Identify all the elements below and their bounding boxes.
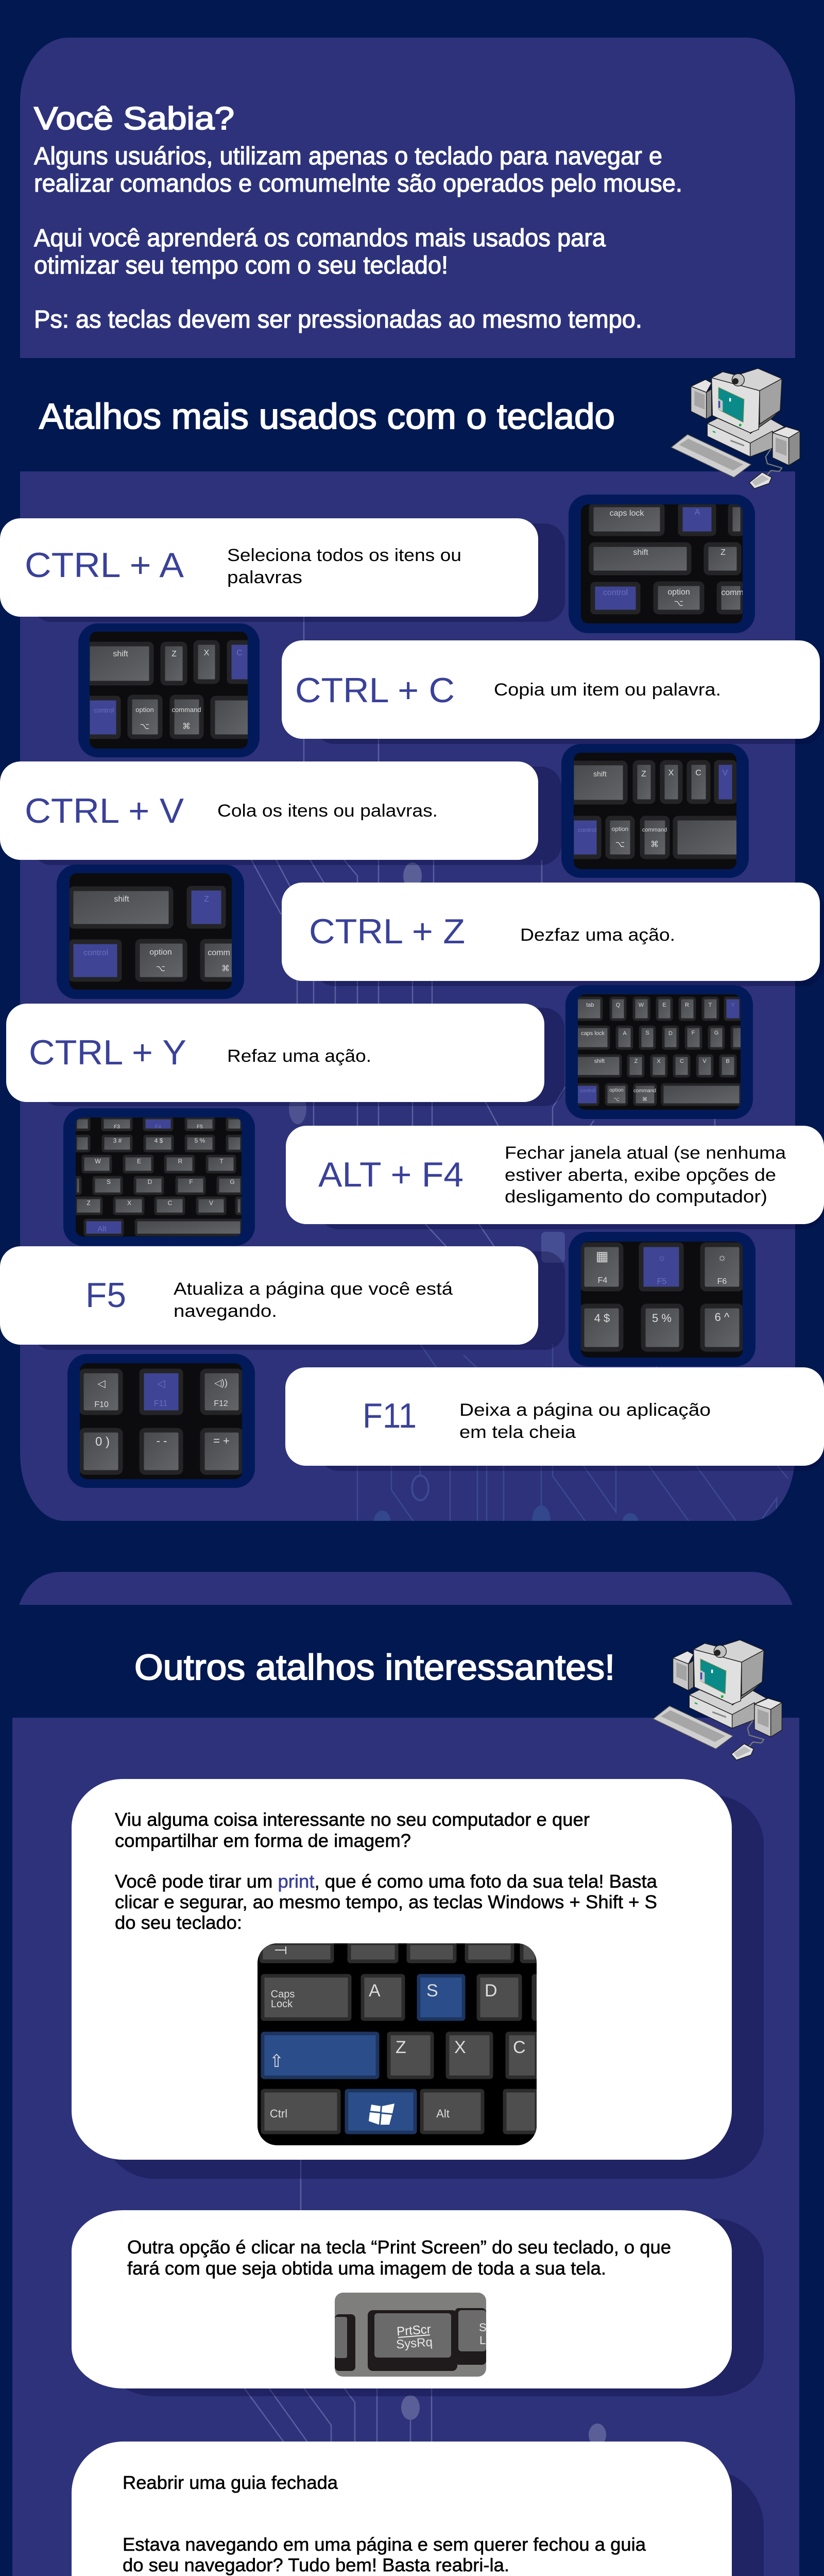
keyboard image: Z: ⌥ bbox=[156, 964, 165, 973]
text block: reabrir: do seu navegador? Tudo bem! Basta reabri-la. bbox=[123, 2554, 509, 2575]
text block: intro: Alguns usuários, utilizam apenas o teclado para navegar e bbox=[34, 143, 662, 170]
keyboard image: prtscr key: PrtScr bbox=[396, 2323, 432, 2338]
keyboard image: F4: V bbox=[209, 1199, 213, 1207]
text block: print intro: do seu teclado: bbox=[115, 1912, 242, 1933]
card: CTRL + C bbox=[282, 640, 820, 739]
keyboard image: F11: = + bbox=[213, 1434, 230, 1447]
keyboard image: Y: R bbox=[685, 1002, 689, 1008]
keyboard image: C: option bbox=[135, 706, 154, 714]
card: CTRL + Y bbox=[6, 1004, 544, 1102]
keyboard image: Y: ⌘ bbox=[642, 1097, 647, 1103]
keyboard image: F4: T bbox=[219, 1158, 224, 1165]
keyboard image: F4: 5 % bbox=[195, 1137, 205, 1144]
card: reabrir guia bbox=[72, 2442, 764, 2576]
text block: intro: Ps: as teclas devem ser pressionadas ao mesmo tempo. bbox=[34, 306, 642, 333]
keyboard image: prtscr key: L bbox=[479, 2334, 486, 2347]
keyboard image: Y: option bbox=[609, 1088, 624, 1093]
keyboard image: prtscr key: SysRq bbox=[396, 2335, 433, 2351]
keyboard image: F4: Alt bbox=[97, 1225, 107, 1233]
heading: outros atalhos: Outros atalhos interessantes! bbox=[134, 1647, 615, 1687]
keyboard image: Y: F bbox=[692, 1030, 695, 1036]
text block: print screen bbox=[127, 2236, 671, 2279]
text block: reabrir bbox=[123, 2472, 671, 2576]
keyboard image: C: ⌥ bbox=[140, 722, 149, 731]
keyboard image: F11: F12 bbox=[214, 1399, 228, 1408]
shortcut row: CTRL + A bbox=[0, 495, 755, 633]
keyboard image: F5: F6 bbox=[717, 1277, 727, 1286]
keyboard image: C: Z bbox=[171, 650, 177, 658]
keyboard image: V: shift bbox=[593, 770, 607, 778]
icon: retro computer bbox=[671, 368, 800, 488]
text block: intro: Aqui você aprenderá os comandos mais usados para bbox=[34, 225, 606, 252]
keyboard image: F5: 4 $ bbox=[594, 1312, 610, 1325]
keyboard image: windows shift s bbox=[258, 1943, 537, 2145]
panel: atalhos background bbox=[20, 471, 795, 1536]
keyboard image: F11: ◁ bbox=[157, 1378, 165, 1389]
text block: print screen: Outra opção é clicar na tecla “Print Screen” do seu teclado, o que bbox=[127, 2236, 671, 2258]
keyboard image: C bbox=[78, 623, 260, 757]
keyboard image: windows shift s: Z bbox=[396, 2038, 406, 2057]
keyboard image: V: ⌥ bbox=[615, 840, 625, 849]
keyboard image: Y: control bbox=[580, 1088, 595, 1094]
keyboard image: V: ⌘ bbox=[650, 840, 659, 849]
card: CTRL + C: Copia um item ou palavra. bbox=[494, 680, 721, 700]
keyboard image: Z: control bbox=[83, 948, 108, 957]
shortcut row: CTRL + V bbox=[0, 744, 749, 878]
keyboard image: V: Z bbox=[641, 770, 646, 778]
card: ALT + F4: Fechar janela atual (se nenhuma bbox=[505, 1143, 786, 1163]
text block: intro bbox=[34, 143, 682, 333]
keyboard image: prtscr key: S bbox=[479, 2321, 487, 2334]
keyboard image: Z: comm bbox=[208, 948, 230, 957]
keyboard image: F5 bbox=[569, 1232, 756, 1366]
card: F5: F5 bbox=[85, 1276, 126, 1315]
keyboard image: V: command bbox=[642, 827, 667, 833]
keyboard image: F4: R bbox=[178, 1158, 183, 1165]
keyboard image: V: C bbox=[695, 769, 701, 777]
card: CTRL + A bbox=[0, 518, 538, 617]
keyboard image: Y: E bbox=[662, 1002, 666, 1008]
keyboard image: Y: ⌥ bbox=[613, 1097, 620, 1103]
keyboard image: F11: ◁ bbox=[97, 1378, 106, 1389]
panel: small divider tab bbox=[19, 1572, 793, 1605]
keyboard image: F5: F4 bbox=[598, 1276, 607, 1285]
keyboard image: windows shift s: Lock bbox=[271, 1998, 293, 2010]
keyboard image: C: command bbox=[171, 706, 201, 714]
card: print screen bbox=[72, 2210, 764, 2396]
keyboard image: Y: tab bbox=[586, 1002, 594, 1008]
keyboard image: A: ⌥ bbox=[674, 599, 683, 608]
text block: intro: otimizar seu tempo com o seu teclado! bbox=[34, 252, 448, 279]
keyboard image: F11 bbox=[67, 1354, 255, 1488]
heading: você sabia: Você Sabia? bbox=[34, 101, 234, 137]
keyboard image: Y bbox=[565, 985, 753, 1119]
keyboard image: F4: E bbox=[137, 1158, 141, 1165]
keyboard image: windows shift s: C bbox=[513, 2038, 526, 2057]
keyboard image: Z: Z bbox=[204, 895, 209, 904]
card: CTRL + Z: CTRL + Z bbox=[309, 912, 465, 951]
keyboard image: F11: F10 bbox=[94, 1400, 109, 1409]
text block: intro: realizar comandos e comumelnte são operados pelo mouse. bbox=[34, 170, 682, 197]
keyboard image: V: control bbox=[578, 826, 596, 834]
keyboard image: A: caps lock bbox=[610, 509, 644, 518]
keyboard image: Y: C bbox=[680, 1058, 684, 1064]
keyboard image: F5: ☼ bbox=[717, 1252, 727, 1263]
keyboard image: F11: 0 ) bbox=[95, 1435, 110, 1449]
card: ALT + F4: estiver aberta, exibe opções de bbox=[505, 1165, 776, 1185]
keyboard image: Y: G bbox=[714, 1030, 718, 1036]
keyboard image: V: option bbox=[612, 825, 628, 833]
keyboard image: windows shift s: A bbox=[369, 1981, 381, 2001]
keyboard image: Y: Y bbox=[731, 1002, 735, 1008]
card: CTRL + A: Seleciona todos os itens ou bbox=[227, 546, 461, 565]
keyboard image: A: control bbox=[603, 588, 628, 597]
card: ALT + F4 bbox=[286, 1126, 824, 1224]
card: CTRL + C: CTRL + C bbox=[295, 671, 455, 710]
keyboard image: F4: F3 bbox=[114, 1124, 120, 1130]
keyboard image: V: X bbox=[668, 769, 674, 777]
keyboard image: Y: shift bbox=[594, 1058, 605, 1064]
card: ALT + F4: ALT + F4 bbox=[318, 1155, 464, 1194]
keyboard image: C: control bbox=[94, 706, 114, 714]
keyboard image: A: comm bbox=[721, 588, 744, 597]
keyboard image: F5: 6 ^ bbox=[715, 1311, 730, 1324]
keyboard image: C: C bbox=[236, 649, 243, 657]
shortcut row: ALT + F4 bbox=[63, 1108, 824, 1246]
card: F11: em tela cheia bbox=[459, 1422, 576, 1442]
keyboard image: F4: Z bbox=[87, 1199, 91, 1207]
keyboard image: A: shift bbox=[633, 548, 648, 557]
shortcut row: CTRL + Z bbox=[57, 865, 824, 999]
keyboard image: F4: 3 # bbox=[113, 1137, 122, 1144]
card: CTRL + V: Cola os itens ou palavras. bbox=[217, 801, 438, 821]
card: F5: navegando. bbox=[174, 1301, 277, 1321]
keyboard image: windows shift s: ⇧ bbox=[269, 2052, 284, 2071]
keyboard image: F4: S bbox=[107, 1178, 111, 1185]
shortcut row: F11 bbox=[67, 1354, 824, 1488]
shortcut row: F5 bbox=[0, 1232, 756, 1366]
panel: outros atalhos background bbox=[12, 1718, 799, 2576]
keyboard image: windows shift s: D bbox=[485, 1981, 497, 2001]
card: CTRL + Z: Dezfaz uma ação. bbox=[520, 925, 675, 945]
keyboard image: Y: X bbox=[657, 1058, 661, 1064]
keyboard image: F5: ☼ bbox=[658, 1252, 666, 1263]
keyboard image: A: option bbox=[667, 588, 690, 597]
keyboard image: F4: G bbox=[230, 1178, 235, 1185]
panel: você sabia bbox=[20, 38, 795, 358]
keyboard image: F4: 4 $ bbox=[154, 1137, 163, 1144]
icon: retro computer second bbox=[653, 1640, 782, 1760]
keyboard image: windows shift s: Caps bbox=[271, 1989, 295, 2000]
heading: atalhos mais usados: Atalhos mais usados com o teclado bbox=[39, 396, 615, 436]
keyboard image: F4: X bbox=[127, 1199, 131, 1207]
keyboard image: F4: C bbox=[168, 1199, 173, 1207]
keyboard image: Y: T bbox=[709, 1002, 712, 1008]
keyboard image: F5: F5 bbox=[657, 1277, 666, 1286]
keyboard image: C: X bbox=[204, 649, 210, 657]
text block: print intro: Viu alguma coisa interessante no seu computador e quer bbox=[115, 1809, 590, 1830]
keyboard image: Y: A bbox=[623, 1030, 627, 1037]
shortcut row: CTRL + Y bbox=[6, 985, 753, 1119]
text block: print intro: clicar e segurar, ao mesmo tempo, as teclas Windows + Shift + S bbox=[115, 1891, 657, 1912]
keyboard image: F11: ◁)) bbox=[214, 1378, 228, 1388]
keyboard image: Y: command bbox=[633, 1088, 656, 1094]
keyboard image: F5: ▦ bbox=[596, 1248, 608, 1264]
text block: print intro bbox=[115, 1809, 658, 1933]
text block: reabrir: Reabrir uma guia fechada bbox=[123, 2472, 338, 2493]
keyboard image: C: shift bbox=[113, 650, 128, 658]
card: F11: F11 bbox=[363, 1396, 417, 1435]
card: CTRL + A: CTRL + A bbox=[25, 546, 184, 585]
card: CTRL + A: palavras bbox=[227, 568, 302, 587]
keyboard image: V bbox=[561, 744, 749, 878]
card: CTRL + Y: CTRL + Y bbox=[29, 1033, 186, 1072]
keyboard image: windows shift s: Alt bbox=[436, 2107, 450, 2120]
keyboard image: F4: F5 bbox=[197, 1124, 203, 1130]
text block: print intro: Você pode tirar um print, que é como uma foto da sua tela! Basta bbox=[115, 1871, 658, 1892]
card: F11 bbox=[285, 1367, 824, 1466]
card: F5: Atualiza a página que você está bbox=[174, 1279, 453, 1299]
keyboard image: F5: 5 % bbox=[652, 1312, 672, 1325]
text block: print intro: compartilhar em forma de imagem? bbox=[115, 1830, 411, 1851]
keyboard image: Y: Q bbox=[616, 1002, 621, 1008]
keyboard image: Y: V bbox=[702, 1058, 707, 1064]
keyboard image: Y: W bbox=[639, 1002, 644, 1008]
shortcut row: CTRL + C bbox=[78, 623, 824, 757]
card: CTRL + V: CTRL + V bbox=[25, 791, 184, 831]
keyboard image: Y: caps lock bbox=[581, 1030, 605, 1037]
keyboard image: Y: S bbox=[645, 1030, 649, 1036]
text block: print screen: fará com que seja obtida uma imagem de toda a sua tela. bbox=[127, 2258, 606, 2279]
card: print shortcut bbox=[72, 1779, 764, 2179]
card: CTRL + V bbox=[0, 761, 538, 860]
keyboard image: Z: shift bbox=[114, 895, 129, 904]
keyboard image: V: V bbox=[723, 769, 728, 777]
keyboard image: Z: option bbox=[149, 948, 172, 957]
keyboard image: F4: W bbox=[95, 1158, 101, 1165]
keyboard image: Y: B bbox=[726, 1058, 730, 1064]
keyboard image: F4: D bbox=[148, 1178, 152, 1185]
keyboard image: Z: ⌘ bbox=[221, 964, 230, 973]
card: F5 bbox=[0, 1246, 538, 1345]
keyboard image: Y: Z bbox=[634, 1058, 638, 1064]
keyboard image: prtscr key bbox=[335, 2293, 487, 2377]
card: CTRL + Y: Refaz uma ação. bbox=[227, 1046, 371, 1066]
keyboard image: A: A bbox=[695, 508, 700, 517]
card: CTRL + Z bbox=[282, 883, 820, 981]
card: F11: Deixa a página ou aplicação bbox=[459, 1400, 711, 1420]
keyboard image: Z bbox=[57, 865, 244, 999]
keyboard image: Y: D bbox=[668, 1030, 673, 1037]
keyboard image: F4 bbox=[63, 1108, 255, 1246]
keyboard image: F11: - - bbox=[157, 1434, 167, 1447]
keyboard image: F11: F11 bbox=[154, 1399, 167, 1408]
keyboard image: F4: F4 bbox=[155, 1124, 161, 1130]
card: ALT + F4: desligamento do computador) bbox=[505, 1187, 767, 1207]
keyboard image: A bbox=[569, 495, 755, 633]
keyboard image: F4: F bbox=[189, 1178, 193, 1185]
text block: reabrir: Estava navegando em uma página e sem querer fechou a guia bbox=[123, 2534, 646, 2555]
keyboard image: windows shift s: S bbox=[426, 1981, 438, 2001]
keyboard image: A: Z bbox=[720, 548, 726, 557]
keyboard image: windows shift s: Ctrl bbox=[270, 2107, 287, 2120]
keyboard image: windows shift s: X bbox=[454, 2038, 466, 2057]
keyboard image: C: ⌘ bbox=[182, 722, 191, 731]
